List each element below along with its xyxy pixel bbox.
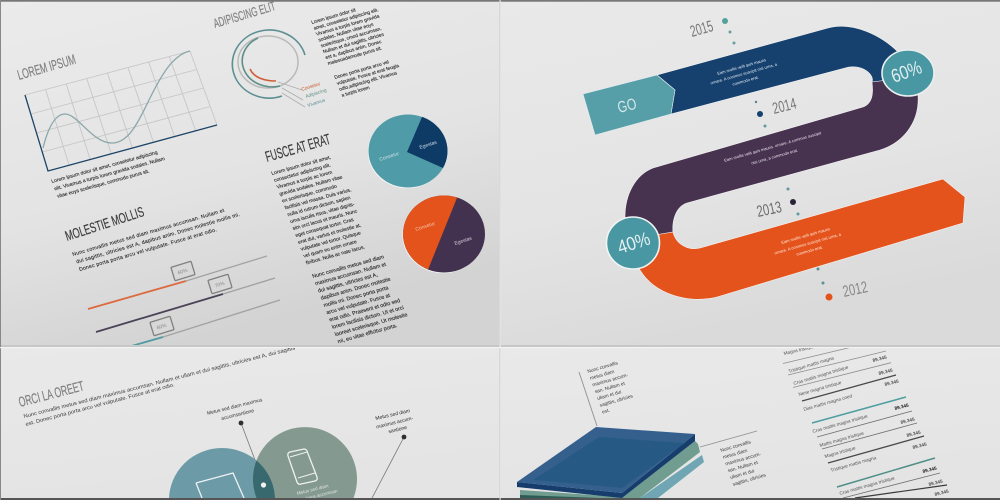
price table: Tristique mattis magna: [830, 455, 877, 473]
text block: top paragraph: Vivamus a turpis lorem gravida: [315, 14, 381, 38]
price table: Cras mattis magna tristique: [812, 413, 868, 434]
text block: top paragraph: amet, consetetur adipiscing elit.: [313, 7, 380, 32]
navy ribbon text: Eam mollis velit quis mauris: [717, 57, 767, 76]
go arrow tab: [583, 75, 675, 135]
ring chart legend: [302, 82, 326, 107]
purple ribbon text: nisi urna, a commodo erat.: [751, 147, 799, 166]
text block: top paragraph: scelerisque, cmod accumsan.: [320, 26, 383, 49]
timeline year 2014: 2014: [771, 96, 798, 118]
heading: Lorem Ipsum: LOREM IPSUM: [15, 51, 78, 83]
timeline year 2013: [755, 188, 800, 221]
right circle caption: Metus sed diam: [296, 483, 329, 496]
panel: document page with charts: [15, 0, 485, 347]
text block: second paragraph: odio,adipiscing elit. Vivamus: [338, 70, 399, 93]
chart caption: vitae eoys scelerisque, commodo purus sit.: [56, 169, 150, 200]
ribbon segment: orange: [625, 179, 965, 299]
stack caption right: ullam et dui: [729, 468, 755, 481]
timeline year 2012: 2012: [841, 279, 869, 301]
progress bars: 70%: [214, 281, 226, 289]
text block: Fusce first column: sim orci lacus et mauris. Nunc: [292, 208, 359, 232]
text block: Fusce first column: eget consequat tortor. Cras: [295, 217, 355, 239]
price table: Tristique mattis magna: [788, 355, 835, 374]
venn label right: maximus accum-: [376, 415, 414, 431]
text block: Fusce first column: vulputate vel tortor. Quisque: [300, 230, 362, 253]
text block: Fusce second column: maximus accumsan. Nullam et: [314, 262, 388, 287]
price table: Magna tristique: [783, 344, 816, 356]
stack caption right: sagittis, ultricies: [732, 472, 767, 488]
venn label left: Metus sed diam maximus: [207, 397, 263, 417]
price table: 89.345: [922, 466, 938, 474]
progress bars: 60%: [177, 268, 189, 276]
radial ring chart: [232, 30, 305, 107]
pie chart: orange and purple: [402, 196, 485, 274]
chart caption: elit. Vivamus a turpis lorem gravida sodales. Nullam: [53, 156, 166, 192]
text block: Fusce second column: mi, eu vitae efficitur porta.: [337, 323, 398, 345]
price table: 89.345: [900, 417, 916, 425]
text block: Fusce first column: finibus. Nulla ac nate lacus.: [305, 245, 366, 266]
text block: molestie paragraph: dui sagittis, ultricies est A, dapibus anim. Donec molestie mollis mi.: [75, 212, 241, 265]
icon: phone: [288, 449, 317, 484]
orange ribbon text: ornare. A commos suscipit nisi urna, a: [774, 231, 842, 255]
price table: 89.345: [934, 489, 950, 497]
stack caption top: Nunc convallis: [587, 360, 619, 375]
navy ribbon text: commodo erat.: [732, 74, 759, 87]
text block: top paragraph: est a, dapibus anim. Donec: [325, 39, 383, 61]
timeline year 2015: 2015: [688, 18, 715, 41]
text block: Fusce second column: mollis mi. Donec porta porta: [323, 285, 390, 309]
text block: top paragraph: sodales. Nullam vitae eoys: [318, 22, 375, 43]
heading: Orci la oreet: ORCI LA OREET: [17, 377, 86, 410]
timeline year 2013: 2013: [755, 199, 783, 221]
badge: 60 percent: 60%: [889, 57, 925, 88]
text block: Fusce second column: Nunc convallis metus sed diam: [312, 254, 386, 280]
isometric stack: [517, 427, 704, 498]
timeline year 2014: [755, 96, 798, 128]
heading: Molestie mollis: MOLESTIE MOLLIS: [63, 203, 146, 244]
text block: second paragraph: Donec porta porta arcu vel: [334, 59, 390, 81]
price table: Mattis magna tristique: [819, 430, 865, 448]
price table: 89.345: [872, 355, 888, 363]
stack caption top: ullam et dui: [596, 389, 622, 402]
ring chart legend: Consetur: [301, 81, 322, 93]
purple ribbon text: Eam mollis velit quis mauris. ornare. A commos suscipit: [724, 130, 822, 163]
timeline year 2015: [688, 18, 736, 44]
price table: Magna tristique: [824, 445, 856, 459]
price table: 89.345: [894, 403, 910, 411]
text block: second paragraph: a turpis lorem: [341, 85, 371, 99]
text block: Fusce first column: nulla id rutrum dictum, sapien: [287, 195, 352, 218]
venn label left: accumsantione: [221, 408, 255, 422]
venn circles: [169, 427, 357, 500]
ribbon segment: purple: [625, 78, 918, 240]
go arrow tab: GO: [616, 96, 638, 117]
stack caption top: sagittis, ultricies: [599, 393, 634, 409]
text block: second paragraph: vulputate. Fusce at erat feugia: [336, 63, 400, 87]
text block: Fusce second column: erat odio. Praesent et odio sed: [328, 298, 401, 323]
pie chart: teal and navy: [368, 114, 448, 188]
ring chart legend: Adipiscing: [305, 87, 328, 100]
text block: Fusce first column: vel quam eu enim ornare: [303, 239, 358, 259]
progress bars: [88, 256, 280, 347]
stack caption right: metus diam: [722, 448, 748, 461]
pie chart: orange and purple: Egestas: [454, 235, 473, 247]
ring chart legend: Vivamus: [307, 97, 327, 109]
text block: Fusce first column: Vivamus a turpis ac lorem: [276, 170, 333, 191]
text block: Fusce first column: facilisis vel massa. Duis varius,: [284, 187, 352, 211]
badge: 60 percent: [882, 50, 934, 96]
venn label right: [375, 410, 413, 434]
price table: 89.345: [928, 479, 944, 487]
stack caption right: maximus accum-: [725, 451, 762, 467]
intro text line two: est. Donec porta porta arcu vel vulputate. Fusce at erat odio.: [25, 382, 175, 428]
stack caption top: maximus accum-: [592, 372, 629, 388]
text block: Fusce first column: consectetur adipiscing elit.: [273, 163, 332, 184]
price table: Nese magna tristique: [798, 380, 842, 397]
price table: Dias mattis magna coed: [803, 393, 853, 412]
price table: 89.345: [884, 379, 900, 387]
panel: layered stack and price table: [517, 344, 950, 498]
right circle caption: [296, 484, 338, 498]
pie chart: teal and navy: Egestas: [419, 139, 438, 151]
ribbon segment: navy: [657, 26, 905, 114]
icon: laptop: [196, 473, 244, 498]
stack caption right: Nunc convallis: [720, 439, 752, 454]
intro text line one: Nunc convallis metus sed diam maximus accumsan. Nullam et ullam et dui sagittis, ultricies est A, dui sagittis: [23, 345, 296, 420]
text block: Fusce first column: Lorem ipsum dolor sit amet,: [271, 155, 332, 177]
pie chart: orange and purple: Consetur: [415, 221, 436, 233]
price table: Cras mattis magna tristique: [793, 364, 849, 386]
text block: Fusce first column: erat dui, varius et molestie at,: [297, 223, 362, 246]
stack caption top: san. Nullam et: [594, 381, 627, 395]
timeline year 2012: [816, 268, 869, 301]
price table: 89.345: [906, 430, 922, 438]
venn leader lines: [239, 421, 406, 498]
venn label right: santione: [388, 425, 408, 435]
badge: 40 percent: [606, 217, 660, 269]
text block: top paragraph: Nullam et dui sagittis, ultricies: [322, 32, 386, 55]
pie chart: teal and navy: Consetur: [379, 151, 400, 163]
price table: 89.345: [912, 442, 928, 450]
chart caption: Lorem ipsum dolor sit amet, consetetur adipiscing: [51, 150, 159, 185]
text block: Fusce second column: dapibus anim. Donec molestie: [320, 277, 392, 302]
text block: Fusce second column: dui sagittis, ultricies est A,: [317, 272, 379, 294]
heading: Fusce at erat: FUSCE AT ERAT: [263, 131, 333, 166]
progress bars: 60%: [156, 323, 168, 331]
text block: top paragraph: malesuadamode purus sit.: [327, 46, 383, 67]
text block: Fusce first column: urna iaculis risus, vitae dignis-: [289, 202, 356, 225]
panel: venn diagram: [17, 345, 414, 500]
stack caption right: san. Nullam et: [727, 460, 760, 474]
venn label right: Metus sed diam: [375, 408, 411, 422]
text block: top paragraph: Lorem ipsum dolor sit: [311, 7, 357, 26]
price table: [783, 344, 950, 498]
orange ribbon text: commodo erat.: [796, 244, 823, 257]
orange ribbon text: Eam mollis velit quis mauris: [781, 226, 831, 245]
text block: Fusce first column: gravida sodales. Nullam vitae: [279, 174, 344, 198]
stack leader lines: [579, 372, 757, 447]
text block: Fusce second column: laoreet scelerisque. Ut molestie: [334, 312, 409, 338]
panel: S-shaped timeline: [583, 18, 965, 301]
text block: molestie paragraph: Nunc convallis metus sed diam maximus accumsan. Nullam et: [72, 208, 226, 258]
badge: 40 percent: 40%: [615, 229, 653, 259]
stack caption top: metus diam: [589, 369, 615, 382]
text block: Fusce second column: lorem facilisis dictum. Ut et orci: [331, 305, 405, 331]
navy ribbon text: ornare. A commos suscipit nisi urna, a: [710, 61, 778, 85]
stack caption top: est.: [601, 408, 611, 415]
line chart: [25, 51, 217, 171]
price table: Cras mattis magna tristique: [839, 475, 895, 496]
text block: Fusce second column: arcu vel vulputate. Fusce at: [326, 293, 392, 316]
text block: Fusce first column: ex scelerisque, commodo: [281, 184, 338, 204]
price table: 89.345: [878, 368, 894, 376]
text block: molestie paragraph: Donec porta porta arcu vel vulputate. Fusce at erat odio.: [78, 227, 218, 273]
